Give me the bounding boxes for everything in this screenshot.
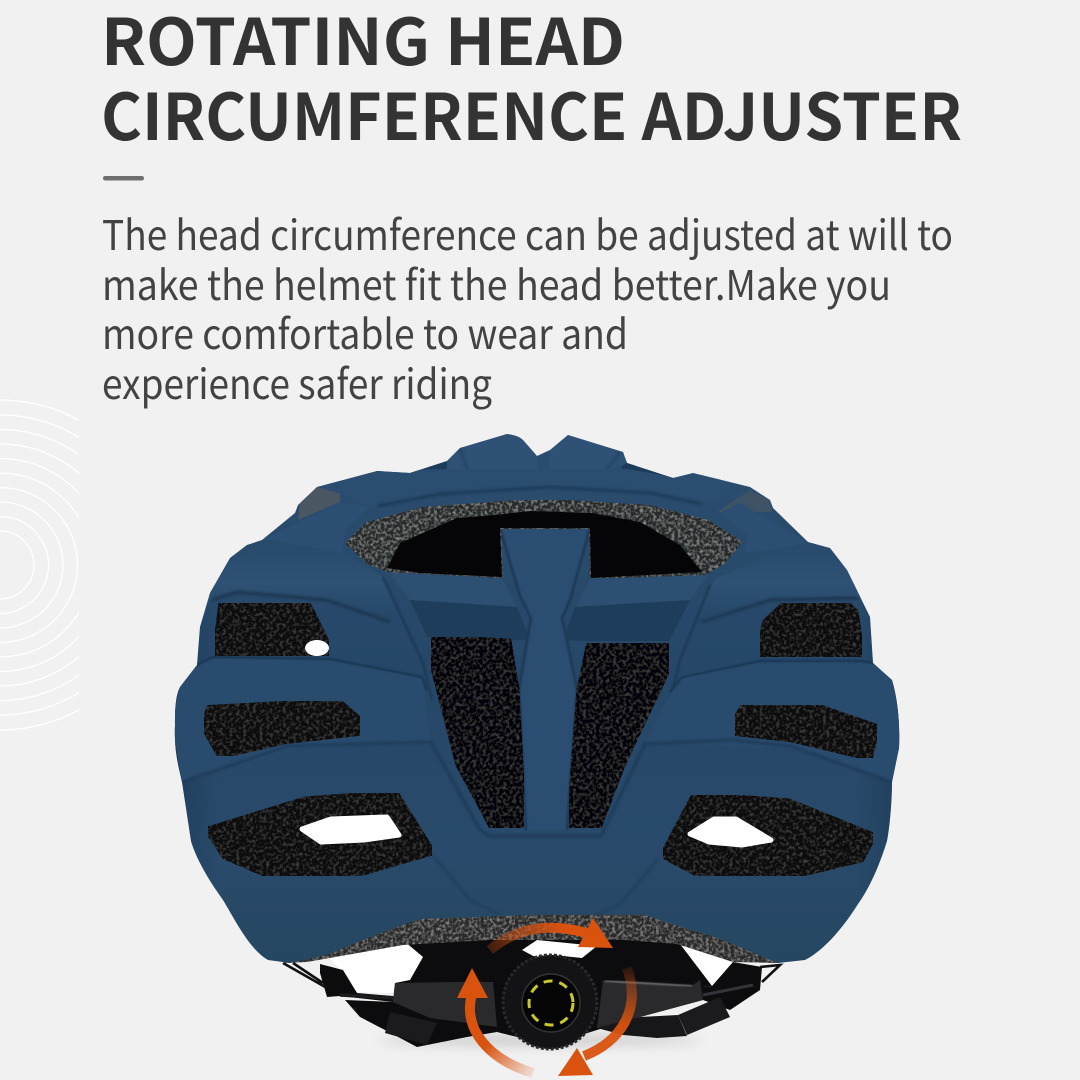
left arrow bbox=[457, 968, 533, 1073]
centre post bbox=[522, 636, 574, 760]
centre left vent bbox=[431, 637, 524, 828]
harness central body bbox=[393, 936, 712, 1045]
adjustment dial bbox=[503, 955, 597, 1049]
crown bumps bbox=[447, 434, 537, 470]
description text: make the helmet fit the head better.Make you bbox=[102, 252, 891, 312]
centre arm recess bbox=[410, 600, 530, 640]
upper left vent bbox=[215, 603, 329, 656]
top oval vent bbox=[346, 500, 741, 578]
lower left vent bbox=[208, 793, 432, 876]
description text: The head circumference can be adjusted at will to bbox=[102, 202, 953, 262]
helmet shell bbox=[175, 434, 899, 963]
right strap bbox=[678, 997, 730, 1035]
description text: more comfortable to wear and bbox=[102, 301, 628, 361]
left wing bbox=[207, 544, 384, 603]
description text: experience safer riding bbox=[102, 351, 492, 411]
middle right vent bbox=[735, 705, 877, 758]
description text bbox=[102, 202, 953, 411]
top arrow bbox=[490, 918, 613, 950]
rear retention harness bbox=[283, 936, 780, 1047]
helmet illustration bbox=[170, 430, 905, 1047]
right plate bbox=[597, 980, 703, 1028]
crown small vents bbox=[410, 461, 447, 473]
title: CIRCUMFERENCE ADJUSTER bbox=[101, 67, 962, 159]
crown band bbox=[318, 469, 730, 494]
left strap bbox=[385, 1012, 437, 1045]
harness openings bbox=[330, 942, 733, 993]
decorative concentric rings bbox=[0, 400, 79, 730]
foam rim bbox=[283, 900, 780, 963]
title divider dash bbox=[103, 176, 144, 180]
left upper facet bbox=[262, 540, 263, 541]
right upper facet bbox=[722, 503, 755, 512]
lower centre ridges bbox=[431, 853, 659, 915]
top opening above dial bbox=[522, 940, 597, 958]
title bbox=[101, 0, 962, 159]
left clip and thin bands bbox=[320, 964, 497, 1047]
right clip and thin bands bbox=[703, 962, 762, 1010]
arm top surface bbox=[481, 604, 516, 606]
ground shadow under harness bbox=[380, 1035, 700, 1045]
lower right vent bbox=[663, 795, 873, 876]
middle left vent bbox=[204, 701, 360, 756]
upper right vent bbox=[760, 603, 862, 657]
left plate bbox=[393, 982, 497, 1027]
right arrow bbox=[558, 968, 632, 1076]
shell shading and ridges bbox=[174, 434, 900, 914]
side crown vents bbox=[298, 487, 340, 520]
right wing bbox=[712, 548, 862, 600]
rotation arrows bbox=[457, 918, 632, 1076]
centre right vent bbox=[569, 643, 669, 828]
mid band bbox=[174, 663, 208, 782]
